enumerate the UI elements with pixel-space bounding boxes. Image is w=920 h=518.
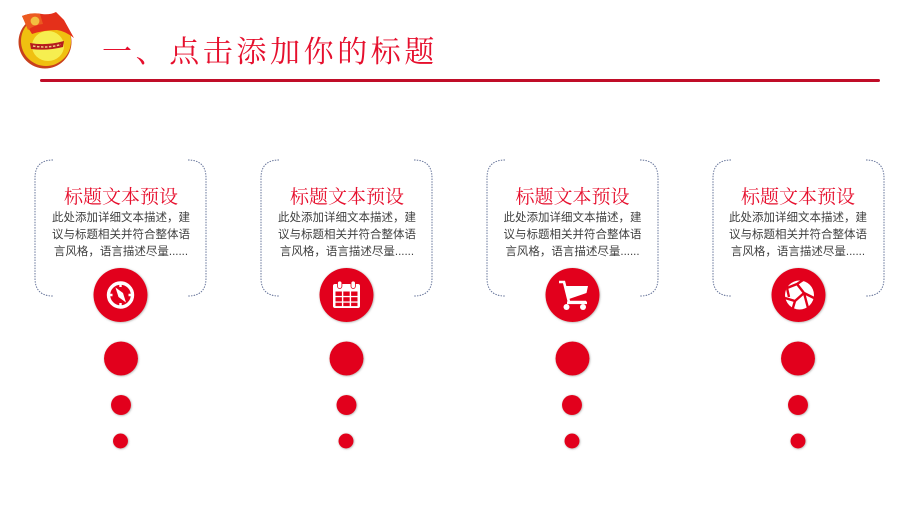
panel heading 1: 标题文本预设 [64, 186, 178, 208]
icon: compass [94, 268, 148, 322]
dot medium 2 [336, 395, 356, 415]
panel heading 4: 标题文本预设 [741, 186, 855, 208]
icon: calendar [320, 268, 374, 322]
dot medium 1 [111, 395, 131, 415]
panel: column 3 [487, 160, 658, 448]
body text 3: 言风格，语言描述尽量...... [505, 244, 640, 258]
dot small 1 [113, 434, 128, 448]
dot large 1 [104, 342, 138, 376]
dot small 4 [790, 434, 806, 448]
panel heading 2: 标题文本预设 [290, 186, 404, 208]
panel frame 1 [35, 160, 206, 296]
panel frame 3 [487, 160, 658, 296]
body text 3 [504, 210, 642, 258]
panel: column 1 [35, 160, 206, 448]
body text 1: 此处添加详细文本描述，建 [52, 210, 190, 224]
dot medium 4 [788, 395, 808, 415]
body text 1: 言风格，语言描述尽量...... [54, 244, 188, 258]
body text 3: 议与标题相关并符合整体语 [504, 227, 642, 241]
panel heading 3: 标题文本预设 [515, 186, 630, 208]
body text 4: 言风格，语言描述尽量...... [731, 244, 865, 258]
body text 4: 议与标题相关并符合整体语 [729, 227, 867, 241]
dot large 3 [556, 342, 590, 376]
body text 2: 此处添加详细文本描述，建 [278, 210, 416, 224]
header rule [40, 79, 880, 82]
panel frame 2 [261, 160, 432, 296]
dot medium 3 [562, 395, 582, 415]
icon: network globe [772, 268, 826, 322]
panel: column 4 [713, 160, 884, 448]
panel frame 4 [713, 160, 884, 296]
panel: column 2 [261, 160, 432, 448]
body text 3: 此处添加详细文本描述，建 [504, 210, 642, 224]
body text 1 [52, 210, 190, 258]
dot small 2 [338, 434, 354, 448]
dot large 4 [781, 342, 815, 376]
body text 2: 议与标题相关并符合整体语 [278, 227, 416, 241]
body text 4 [729, 210, 867, 258]
body text 1: 议与标题相关并符合整体语 [52, 227, 190, 241]
icon: shopping cart [546, 268, 600, 322]
icon: youth league emblem [18, 12, 74, 68]
body text 4: 此处添加详细文本描述，建 [729, 210, 867, 224]
body text 2 [278, 210, 416, 258]
title: 一、点击添加你的标题 [102, 36, 438, 69]
body text 2: 言风格，语言描述尽量...... [280, 244, 414, 258]
dot small 3 [564, 434, 580, 448]
dot large 2 [330, 342, 364, 376]
